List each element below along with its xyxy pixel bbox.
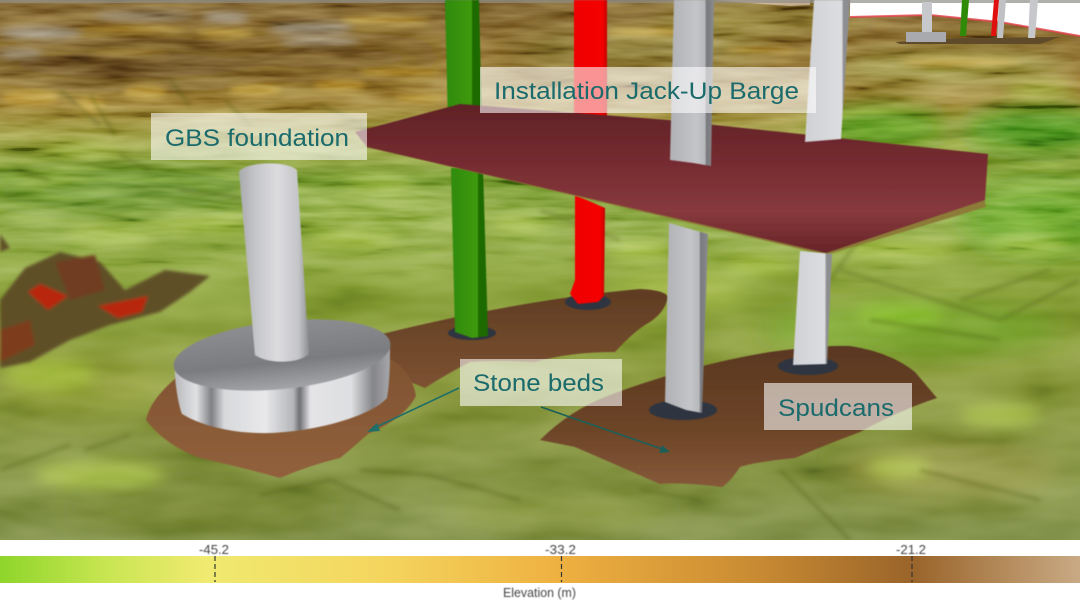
terrain relief texture, near	[0, 150, 1080, 540]
red damaged terrain patch	[0, 234, 210, 368]
arrow: stone bed under barge	[541, 407, 670, 453]
colour scale bar	[0, 556, 1080, 583]
stone bed: back of jack-up barge	[380, 289, 668, 388]
green leg, rear	[445, 0, 488, 338]
green highlights on mid terrain	[5, 83, 1075, 489]
tick values	[199, 542, 926, 557]
sky and top strip	[0, 0, 1080, 36]
label: Stone beds: Stone beds	[473, 370, 604, 397]
terrain relief texture, far	[0, 0, 1080, 300]
elevation legend	[0, 540, 1080, 600]
barge underside	[367, 142, 986, 255]
label: Spudcans	[764, 383, 912, 430]
foundation base wall	[175, 348, 390, 433]
GBS foundation	[170, 163, 394, 433]
tick values: -45.2	[199, 542, 229, 557]
stone bed: around GBS foundation	[146, 340, 416, 478]
foundation column	[239, 163, 309, 362]
label: GBS foundation: GBS foundation	[165, 125, 349, 152]
label: Installation Jack-Up Barge	[480, 67, 816, 113]
red leg, rear lower	[570, 195, 605, 304]
distant jack-up barge and foundation	[895, 0, 1060, 44]
tick values: -33.2	[545, 542, 576, 557]
golden ridge highlights in the distance	[2, 16, 1020, 113]
grey leg, front right	[793, 0, 850, 365]
red leg, rear upper	[574, 0, 607, 130]
label: Spudcans: Spudcans	[778, 395, 894, 422]
grey leg, front left	[665, 0, 714, 413]
spudcan footings	[448, 294, 838, 420]
stone bed: front of jack-up barge	[540, 346, 937, 487]
axis title: Elevation (m)	[503, 585, 576, 600]
label: GBS foundation	[151, 113, 367, 160]
installation jack-up barge deck	[355, 104, 988, 253]
terrain creases	[0, 80, 1080, 540]
arrow: stone bed under GBS foundation	[367, 388, 459, 432]
grey rock patches in distance	[0, 13, 360, 57]
tick marks	[215, 556, 912, 582]
tick values: -21.2	[896, 542, 926, 557]
label: Stone beds	[460, 359, 622, 406]
foundation base top	[170, 310, 394, 400]
label: Installation Jack-Up Barge: Installation Jack-Up Barge	[494, 78, 799, 105]
